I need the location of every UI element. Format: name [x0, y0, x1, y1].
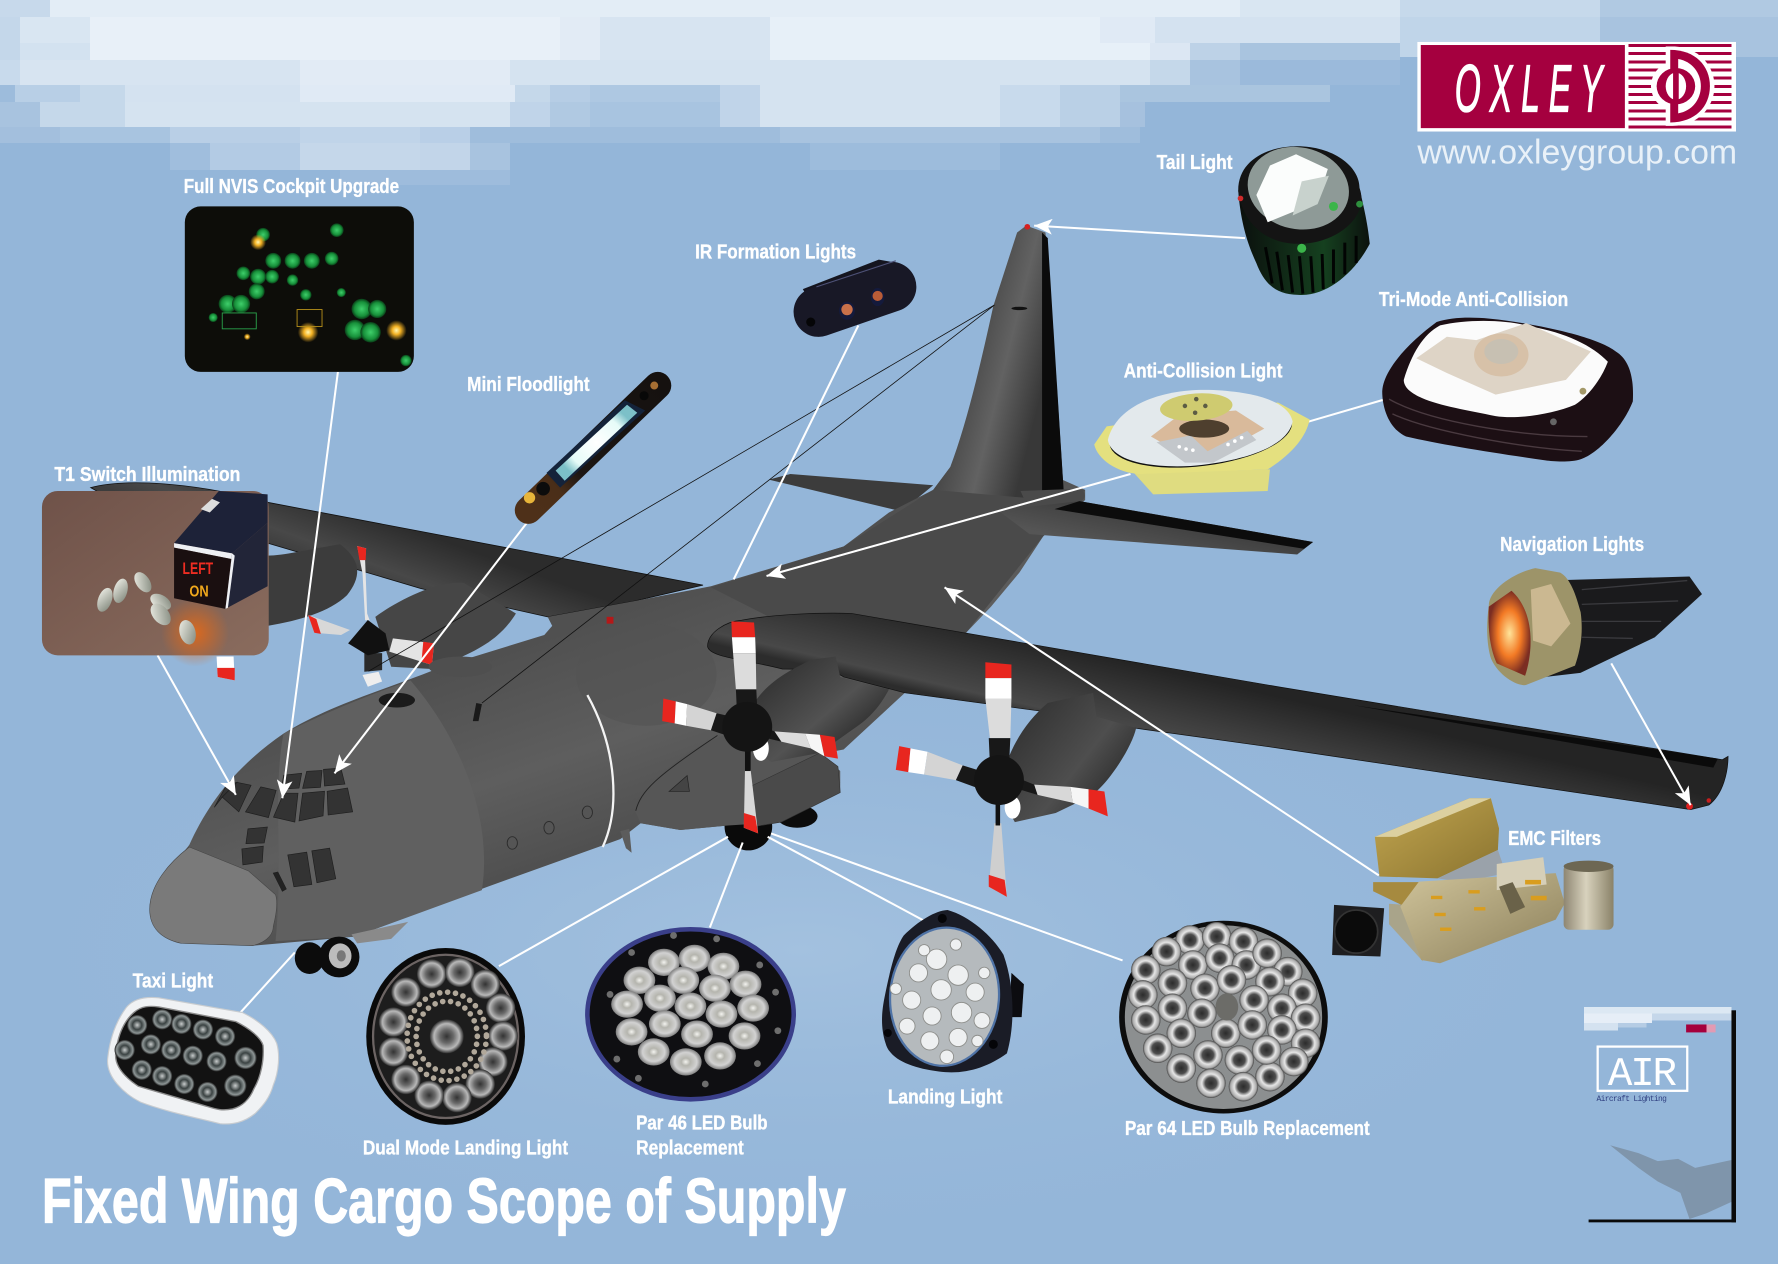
label: Tri-Mode Anti-Collision: Tri-Mode Anti-Collision: [1379, 289, 1568, 311]
product: mini floodlight: [524, 382, 658, 510]
line: par 64: [771, 833, 1123, 960]
arrow: tail light: [1034, 226, 1245, 238]
fin base cap: [1021, 489, 1085, 516]
fuselage: [150, 467, 1085, 946]
main gear wheels: [725, 803, 818, 850]
cockpit windows: [214, 768, 353, 891]
website address: www.oxleygroup.com: [1416, 133, 1737, 171]
gear sponson: [635, 726, 840, 830]
label: EMC Filters: EMC Filters: [1508, 828, 1601, 850]
near outer nacelle: [999, 693, 1136, 822]
arrow: EMC filters: [945, 587, 1379, 875]
brochure jet: [1610, 1145, 1731, 1219]
switch body: [174, 491, 268, 553]
line: par 46: [710, 842, 743, 928]
leader lines and arrows: [158, 226, 1691, 1013]
wing root fairing: [576, 624, 717, 726]
brochure logo: [1686, 1024, 1707, 1032]
product: taxi light: [108, 997, 279, 1124]
near wing: [708, 613, 1728, 810]
brochure AIR box: [1598, 1047, 1687, 1091]
title: Fixed Wing Cargo Scope of Supply: [42, 1166, 846, 1236]
label: Par 64 LED Bulb Replacement: Par 64 LED Bulb Replacement: [1125, 1118, 1370, 1140]
switch legend LEFT: LEFT: [183, 559, 214, 578]
roof hatch: [379, 693, 415, 708]
red beacon: [607, 617, 613, 624]
product: IR formation lights: [787, 255, 923, 344]
forward fuselage shading: [276, 680, 484, 941]
product: dual mode landing light: [366, 948, 525, 1125]
propeller one: [662, 621, 838, 833]
label: Dual Mode Landing Light: Dual Mode Landing Light: [363, 1137, 568, 1159]
label: T1 Switch Illumination: T1 Switch Illumination: [54, 464, 240, 486]
product: EMC filters: [1332, 798, 1614, 963]
silver gold box: [1400, 873, 1565, 963]
logo symbol: [1651, 46, 1714, 126]
product: par 64 LED bulb: [1119, 921, 1328, 1113]
brochure right edge: [1731, 1010, 1736, 1222]
product: tri-mode anti-collision: [1382, 318, 1633, 461]
label: Par 46 LED Bulb Replacement: Replacement: [636, 1137, 744, 1159]
far propeller: [308, 546, 434, 687]
product: tail light: [1238, 138, 1370, 295]
product: navigation lights: [1487, 568, 1702, 685]
sponson marker: [669, 776, 689, 791]
line: IR formation lights: [734, 325, 858, 579]
label: Anti-Collision Light: Anti-Collision Light: [1124, 361, 1283, 383]
far outer propeller blade: [217, 657, 235, 680]
logo wordmark: OXLEY: [1455, 52, 1612, 127]
label: Taxi Light: Taxi Light: [133, 971, 213, 993]
line: landing light: [768, 837, 924, 921]
brochure: AIR aircraft lighting: [1584, 1007, 1736, 1222]
arrow: navigation lights: [1611, 663, 1691, 805]
logo: Oxley: [1417, 42, 1736, 132]
label: Mini Floodlight: Mini Floodlight: [467, 374, 590, 396]
near horizontal stabiliser: [998, 501, 1313, 554]
dorsal bump: [429, 657, 492, 677]
thin black antenna lines: [369, 305, 994, 703]
vertical tail fin: [933, 226, 1064, 499]
sponson rear pod: [750, 753, 840, 827]
far horizontal stabiliser: [769, 474, 933, 511]
gold filter block: [1375, 798, 1499, 878]
portholes: [507, 806, 592, 849]
brochure AIR text: AIR: [1608, 1052, 1677, 1098]
line: tri-mode anti-collision: [1304, 399, 1386, 423]
product: par 46 LED bulb: [585, 927, 796, 1102]
near inner nacelle: [748, 657, 889, 762]
label: Par 46 LED Bulb Replacement: Par 46 LED Bulb: [636, 1112, 768, 1134]
fin slot: [1011, 307, 1027, 310]
brochure sky: [1584, 1007, 1731, 1031]
line: dual mode: [499, 837, 728, 966]
label: Full NVIS Cockpit Upgrade: Full NVIS Cockpit Upgrade: [184, 176, 399, 198]
arrow: anti-collision: [767, 474, 1130, 576]
label: Par 46 LED Bulb Replacement: [636, 1112, 768, 1159]
far wing: [91, 483, 703, 617]
sky banner: [0, 0, 1778, 185]
product: anti-collision light: [1094, 389, 1310, 494]
line: taxi light: [240, 952, 295, 1013]
antenna stub: [473, 703, 482, 721]
label: IR Formation Lights: IR Formation Lights: [695, 242, 856, 264]
logo stripes: [1628, 44, 1731, 129]
brochure bottom edge: [1589, 1220, 1736, 1222]
product: landing light: [882, 910, 1024, 1072]
wing flap: [1354, 705, 1718, 768]
label: Tail Light: Tail Light: [1157, 152, 1233, 174]
arrow: T1 switch: [158, 655, 236, 795]
arrow: mini floodlight: [335, 519, 530, 773]
nose gear: [295, 922, 408, 977]
cylinder connector: [1564, 864, 1614, 930]
T1 bulbs: [94, 569, 198, 646]
arrow: cockpit upgrade: [282, 372, 338, 798]
belly fin: [620, 829, 632, 853]
photo: full NVIS cockpit: [185, 206, 414, 372]
far inner engine nacelle: [375, 583, 516, 669]
fin tip light: [1024, 224, 1030, 230]
nose radome: [150, 847, 277, 946]
label: Landing Light: Landing Light: [888, 1086, 1003, 1108]
rear fuselage shading: [711, 490, 1085, 633]
door line: [587, 695, 613, 847]
black connector: [1332, 905, 1384, 957]
label: Navigation Lights: Navigation Lights: [1500, 534, 1644, 556]
brochure subtitle: Aircraft Lighting: [1597, 1095, 1667, 1104]
fin black trailing strip: [1042, 232, 1064, 494]
photo: T1 switch illumination: [42, 491, 269, 667]
wing tip lights: [1686, 798, 1711, 810]
switch legend ON: ON: [189, 583, 209, 600]
aircraft: C-130 cargo plane: [91, 224, 1728, 977]
far outer engine nacelle: [268, 544, 357, 626]
propeller two: [896, 662, 1108, 897]
